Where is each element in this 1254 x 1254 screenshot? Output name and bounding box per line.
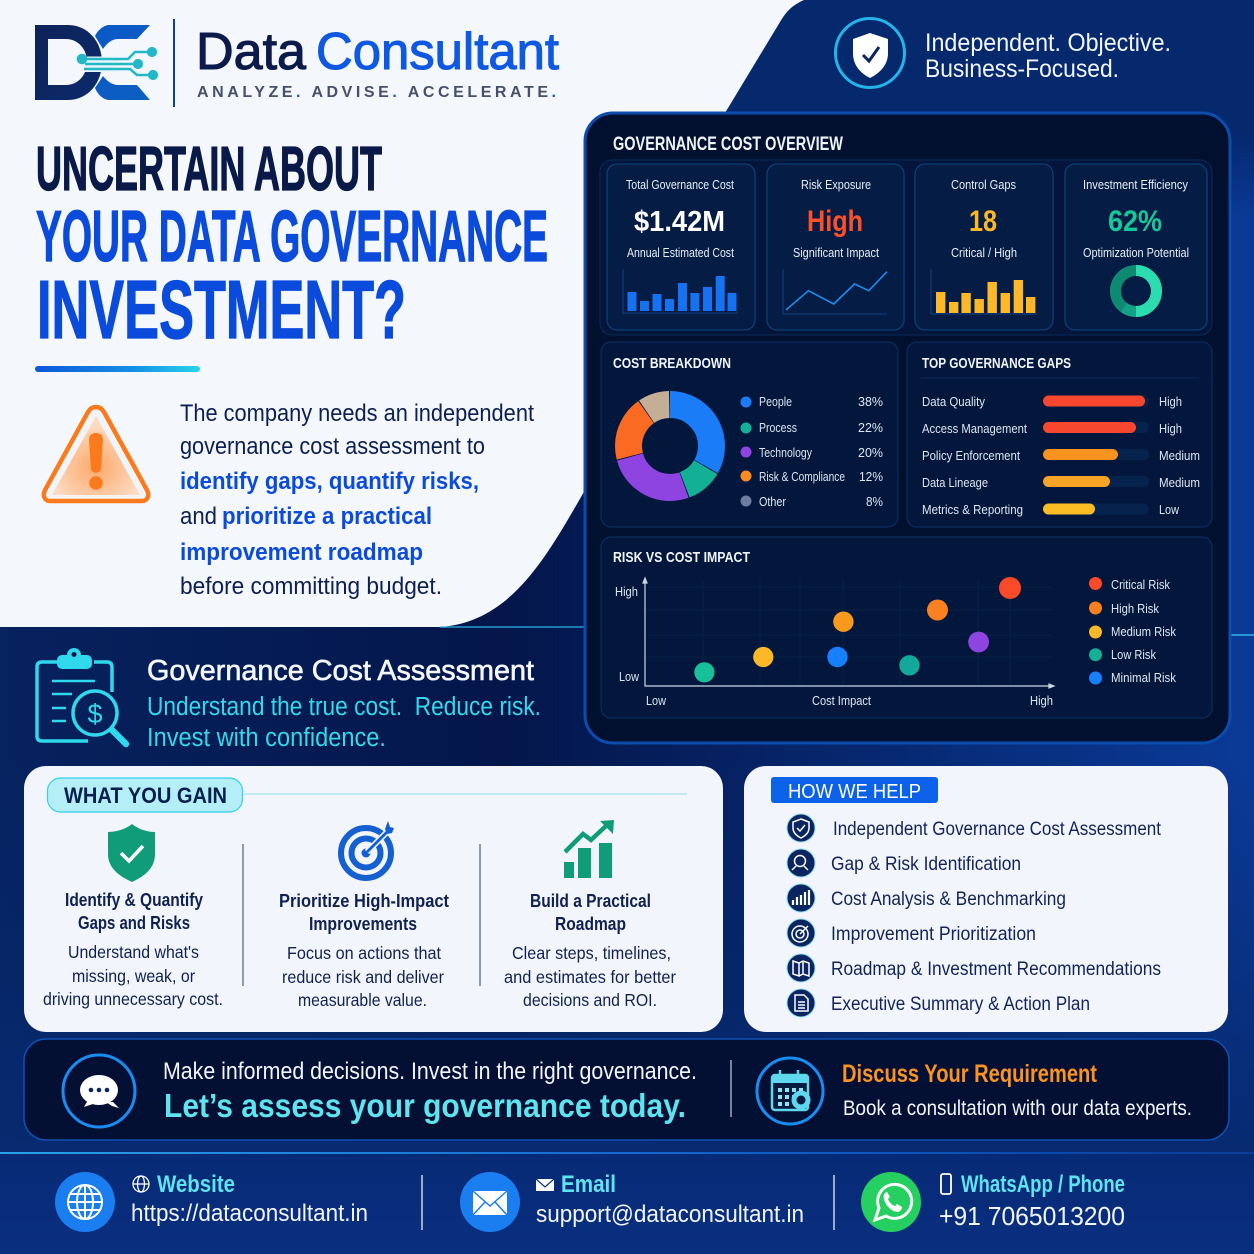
legend: risk levels: Critical Risk [1111, 578, 1171, 592]
card: control gaps: 18 [969, 205, 997, 238]
benefit: identify and quantify: Identify & Quantify [65, 890, 203, 910]
contact: website [55, 1171, 368, 1232]
list item text: Improvement Prioritization [831, 924, 1036, 945]
benefit: identify and quantify: driving unnecessary cost. [43, 989, 223, 1009]
list item text: Cost Analysis & Benchmarking [831, 889, 1066, 910]
bar chart: amber [931, 269, 1037, 314]
title: INVESTMENT? [37, 263, 406, 356]
benefit: practical roadmap [504, 891, 676, 1010]
legend: risk levels: Medium Risk [1111, 625, 1177, 639]
contact: email: support@dataconsultant.in [536, 1201, 804, 1228]
card: risk exposure: High [807, 205, 863, 238]
axis labels: Low [646, 694, 667, 708]
KPI row outline [600, 160, 1212, 335]
legend: cost breakdown [740, 395, 883, 509]
benefit: practical roadmap: Clear steps, timelines, [512, 943, 671, 963]
accent line right of dashboard [1230, 634, 1254, 636]
gap rows: Policy Enforcement [922, 449, 1020, 463]
legend: cost breakdown: Process [759, 421, 797, 435]
legend: cost breakdown: 22% [858, 421, 883, 435]
gap rows: High [1159, 422, 1182, 436]
donut chart: efficiency [1116, 270, 1156, 312]
benefit: practical roadmap: Build a Practical [530, 891, 651, 911]
list item text: Executive Summary & Action Plan [831, 994, 1090, 1015]
assessment subtitle [147, 693, 541, 752]
gap rows: High [1159, 395, 1182, 409]
list item text [831, 819, 1162, 1015]
top tagline text: Business-Focused. [925, 55, 1119, 83]
legend: risk levels: High Risk [1111, 602, 1160, 616]
list item text: Roadmap & Investment Recommendations [831, 959, 1161, 980]
cta action heading: Discuss Your Requirement [842, 1060, 1098, 1088]
pill heading: WHAT YOU GAIN [64, 783, 227, 808]
top right background [700, 0, 1254, 220]
card: total governance cost [607, 164, 755, 330]
axis labels: High [1030, 694, 1053, 708]
intro paragraph: prioritize a practical [222, 503, 432, 530]
icon: clipboard with magnifier [37, 648, 126, 744]
icon: growth chart [564, 820, 614, 878]
gap rows: Low [1159, 503, 1180, 517]
benefit: prioritize improvements [279, 891, 449, 1010]
legend: cost breakdown: Technology [759, 446, 813, 460]
icon: shield badge [836, 18, 904, 88]
contact: whatsapp [861, 1171, 1125, 1232]
icon: clipboard with magnifier: $ [87, 699, 103, 729]
tagline: ANALYZE. ADVISE. ACCELERATE. [197, 84, 556, 101]
contact: email: Email [561, 1171, 616, 1198]
benefit: identify and quantify: Understand what's [68, 942, 199, 962]
benefit: prioritize improvements: Prioritize High-Impact [279, 891, 449, 911]
axis labels: High [615, 585, 638, 599]
card: control gaps: Critical / High [951, 246, 1017, 260]
contact: whatsapp: WhatsApp / Phone [961, 1171, 1125, 1198]
axis labels [615, 585, 1053, 708]
benefit: practical roadmap: decisions and ROI. [523, 990, 657, 1010]
gap rows: Medium [1159, 449, 1200, 463]
icon: target [341, 821, 394, 878]
bar chart: blue [623, 269, 738, 313]
brand name [196, 23, 560, 81]
benefit: prioritize improvements: reduce risk and deliver [282, 967, 444, 987]
title: YOUR DATA GOVERNANCE [36, 197, 548, 277]
donut chart: cost breakdown [628, 404, 712, 488]
title: UNCERTAIN ABOUT [36, 135, 382, 204]
benefit: identify and quantify [43, 890, 223, 1009]
legend: cost breakdown: Risk & Compliance [759, 470, 845, 484]
legend: risk levels: Minimal Risk [1111, 671, 1177, 685]
axis labels: Low [619, 670, 640, 684]
card: investment efficiency: Investment Efficiency [1083, 178, 1189, 192]
icon: calendar [757, 1058, 823, 1124]
card: total governance cost: Total Governance Cost [626, 178, 734, 192]
top tagline text: Independent. Objective. [925, 29, 1171, 57]
cta headline: Let’s assess your governance today. [164, 1087, 686, 1124]
dashboard heading: GOVERNANCE COST OVERVIEW [613, 134, 843, 155]
legend: risk levels [1089, 577, 1177, 685]
gap rows [922, 395, 1200, 517]
intro paragraph: The company needs an independent [180, 400, 534, 427]
intro paragraph: before committing budget. [180, 573, 442, 600]
logo divider [173, 19, 175, 107]
panel: how we help [744, 766, 1228, 1032]
legend: cost breakdown: 12% [859, 470, 883, 484]
card: total governance cost: $1.42M [634, 206, 725, 238]
scatter points [694, 577, 1021, 682]
intro paragraph: governance cost assessment to [180, 433, 485, 460]
benefit: practical roadmap: Roadmap [555, 914, 626, 934]
card: investment efficiency [1065, 164, 1207, 330]
scatter axes [643, 578, 1054, 688]
hero white panel [0, 0, 804, 627]
gap rows: Data Quality [922, 395, 986, 409]
panel: risk vs cost impact [601, 537, 1212, 718]
list item icons [787, 814, 815, 1017]
assessment heading: Governance Cost Assessment [147, 655, 534, 687]
card: risk exposure [767, 164, 904, 330]
benefit: prioritize improvements: Focus on actions that [287, 943, 441, 963]
logo circuit traces [78, 48, 157, 79]
card: control gaps: Control Gaps [951, 178, 1016, 192]
legend: risk levels: Low Risk [1111, 648, 1157, 662]
legend: cost breakdown: 20% [858, 446, 883, 460]
benefit: identify and quantify: missing, weak, or [72, 966, 195, 986]
benefit: identify and quantify: Gaps and Risks [78, 913, 190, 933]
logo [35, 25, 157, 100]
panel: top governance gaps [907, 342, 1212, 527]
icon: chat bubble [63, 1055, 135, 1127]
top tagline text [925, 29, 1171, 83]
icon: green shield [108, 824, 155, 882]
pill heading [48, 778, 242, 812]
logo mark letter D [35, 25, 102, 100]
line chart [783, 269, 887, 314]
brand name: Data [196, 23, 306, 81]
card: total governance cost: Annual Estimated Cost [627, 246, 734, 260]
cta message: Make informed decisions. Invest in the right governance. [163, 1058, 697, 1085]
heading tab: HOW WE HELP [788, 781, 921, 803]
gap rows: Metrics & Reporting [922, 503, 1023, 517]
panel: top governance gaps: TOP GOVERNANCE GAPS [922, 355, 1071, 372]
axis labels: Cost Impact [812, 694, 871, 708]
contact: email [460, 1171, 804, 1232]
benefit: prioritize improvements: Improvements [309, 914, 417, 934]
accent line under hero [440, 626, 590, 628]
brand name: Consultant [316, 23, 560, 81]
gap rows: Data Lineage [922, 476, 988, 490]
assessment subtitle: Invest with confidence. [147, 724, 386, 752]
card: risk exposure: Significant Impact [793, 246, 879, 260]
call to action band [24, 1039, 1229, 1140]
intro paragraph [180, 400, 534, 600]
list item text: Gap & Risk Identification [831, 854, 1021, 875]
contact: website: https://dataconsultant.in [131, 1200, 368, 1227]
panel: cost breakdown [601, 342, 898, 527]
contact: whatsapp: +91 7065013200 [939, 1201, 1125, 1231]
intro paragraph: identify gaps, quantify risks, [180, 468, 479, 495]
title [36, 135, 548, 356]
lower background shading [0, 760, 1254, 1153]
panel: cost breakdown: COST BREAKDOWN [613, 355, 731, 372]
panel: what you gain [24, 766, 723, 1032]
legend: cost breakdown: People [759, 395, 792, 409]
assessment subtitle: Understand the true cost. Reduce risk. [147, 693, 541, 721]
gap rows: Access Management [922, 422, 1027, 436]
card: investment efficiency: Optimization Potential [1083, 246, 1189, 260]
panel: risk vs cost impact: RISK VS COST IMPACT [613, 549, 750, 566]
benefit: practical roadmap: and estimates for better [504, 967, 676, 987]
legend: cost breakdown: Other [759, 495, 786, 509]
intro paragraph: improvement roadmap [180, 539, 423, 566]
legend: cost breakdown: 8% [866, 495, 883, 509]
contact: website: Website [157, 1171, 235, 1198]
logo mark letter C [95, 25, 150, 100]
list item text: Independent Governance Cost Assessment [833, 819, 1162, 840]
card: control gaps [915, 164, 1053, 330]
footer [0, 1152, 1254, 1254]
card: risk exposure: Risk Exposure [801, 178, 871, 192]
benefit: prioritize improvements: measurable value. [298, 990, 427, 1010]
card: investment efficiency: 62% [1108, 205, 1162, 238]
gap rows: Medium [1159, 476, 1200, 490]
icon: warning triangle [44, 407, 148, 501]
legend: cost breakdown: 38% [858, 395, 883, 409]
title underline [35, 366, 200, 372]
intro paragraph: and [180, 503, 217, 530]
cta action text: Book a consultation with our data experts. [843, 1097, 1192, 1120]
